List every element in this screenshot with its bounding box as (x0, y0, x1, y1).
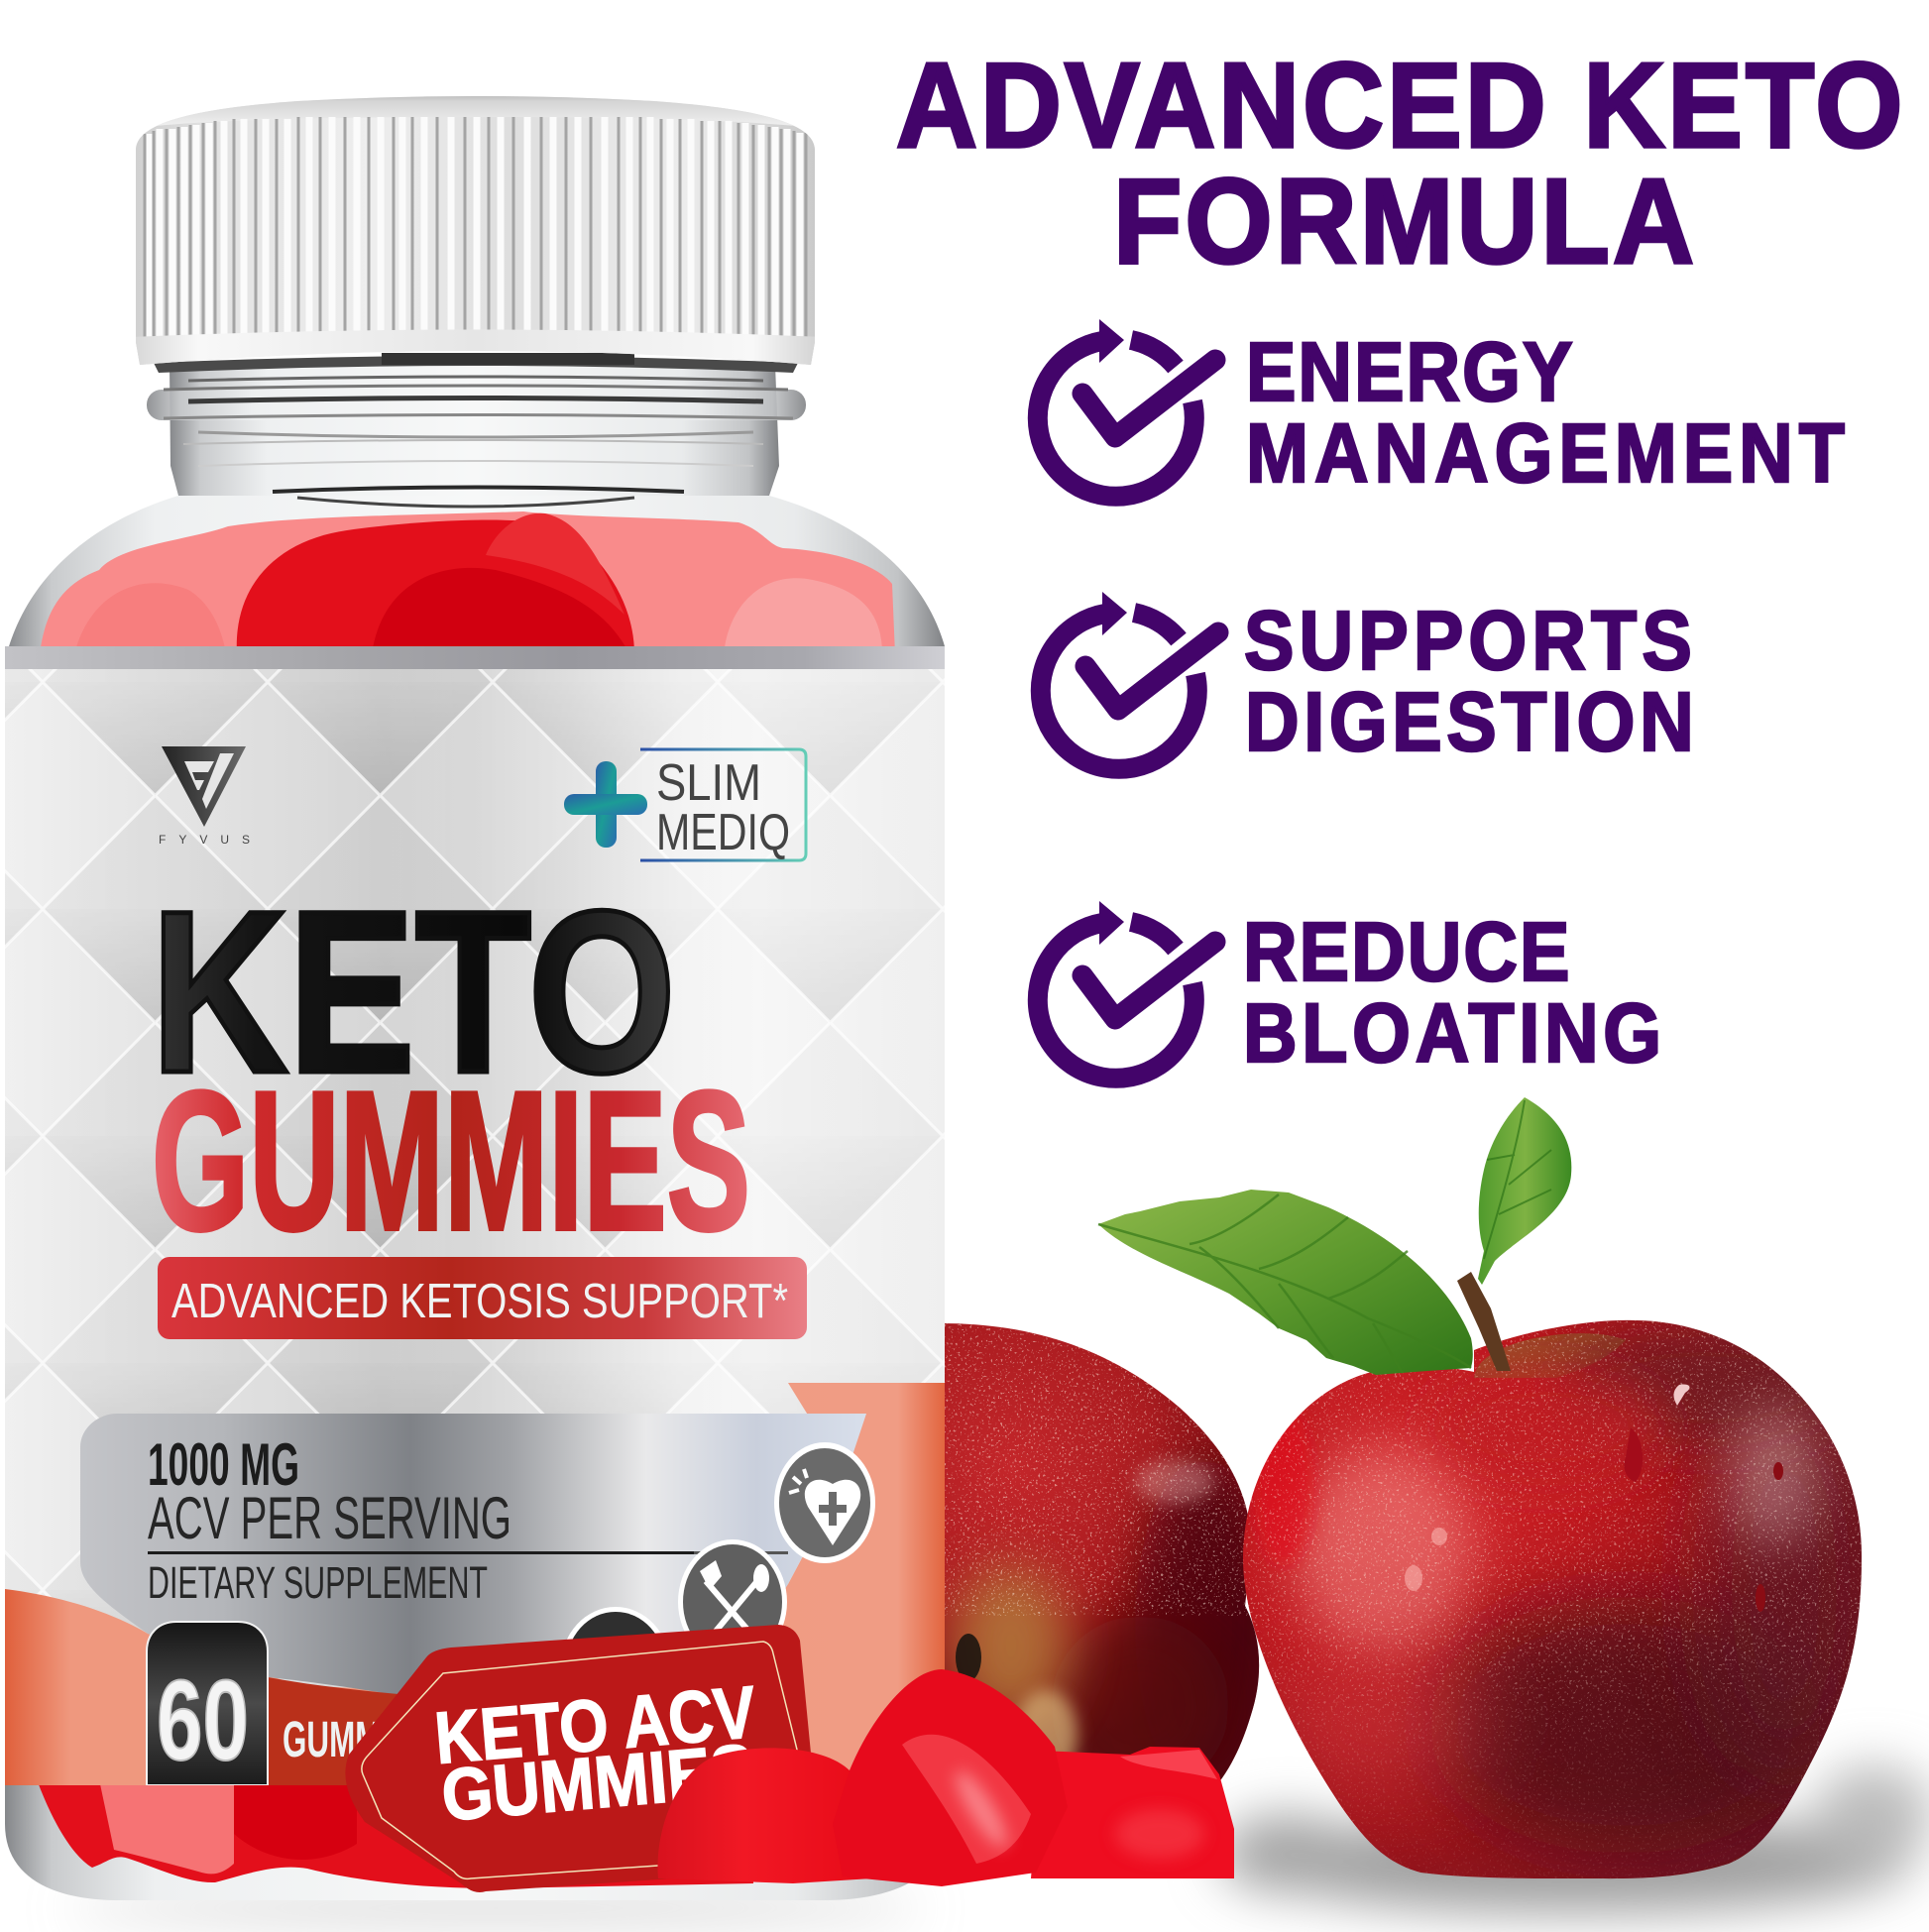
orange panel (5, 1383, 945, 1785)
leaf: large (1098, 1190, 1473, 1375)
gummy: right (1031, 1747, 1234, 1878)
text: gummies count: GUMMIES (283, 1711, 431, 1767)
price tag: keto acv gummies (345, 1625, 818, 1892)
label top band (5, 646, 945, 669)
product name: gummies: GUMMIES (152, 1051, 750, 1272)
bottle (5, 89, 945, 1900)
brand logo: fyvus: FYVUS (159, 833, 250, 847)
icon: energy check cycle (1038, 319, 1215, 497)
icon: bloating check cycle (1038, 901, 1215, 1079)
price tag: keto acv gummies: KETO ACV (432, 1670, 758, 1779)
apple: front (1239, 1316, 1866, 1883)
gummy: center (833, 1669, 1068, 1886)
count badge: 60 (147, 1622, 268, 1785)
apple shading (1239, 1316, 1866, 1883)
text: supports digestion: SUPPORTS (1244, 594, 1692, 687)
apple leaves and stem (1098, 1097, 1571, 1375)
gummies: bottom of jar (37, 1779, 753, 1888)
heading: advanced keto formula: ADVANCED KETO (896, 37, 1903, 172)
panel text: serving: ACV PER SERVING (148, 1485, 511, 1551)
bottle cap (129, 89, 823, 372)
text: reduce bloating: BLOATING (1243, 986, 1661, 1080)
gummies: top of jar (40, 511, 895, 654)
benefit: energy management (1038, 319, 1845, 500)
price tag: keto acv gummies: GUMMIES (438, 1728, 757, 1837)
text: energy management (1246, 325, 1845, 500)
benefit: reduce bloating (1038, 901, 1661, 1080)
red strip (268, 1677, 515, 1785)
silver panel (80, 1414, 866, 1705)
text: energy management: ENERGY (1246, 325, 1572, 418)
panel text: serving (148, 1431, 788, 1608)
count badge: 60: 60 (157, 1657, 249, 1784)
apple: back (945, 1323, 1259, 1780)
pill: advanced ketosis support: ADVANCED KETOSIS SUPPORT* (171, 1275, 788, 1328)
brand logo: slim mediq (564, 749, 806, 861)
text: reduce bloating: REDUCE (1243, 905, 1569, 998)
heading: advanced keto formula: FORMULA (1113, 153, 1694, 288)
product name: keto: KETO (151, 863, 676, 1121)
brand logo: slim mediq: MEDIQ (656, 804, 790, 861)
apple sheen and golden patch (942, 1318, 1274, 1794)
brand logo: fyvus (159, 746, 250, 847)
icon: third badge (561, 1607, 670, 1726)
icon: fork and spoon (678, 1539, 787, 1664)
text: supports digestion (1244, 594, 1694, 768)
stem (1457, 1272, 1511, 1371)
text: energy management: MANAGEMENT (1246, 406, 1845, 500)
benefit: supports digestion (1041, 592, 1694, 769)
bottle glass (5, 496, 945, 1900)
brand logo: slim mediq: SLIM (656, 754, 761, 812)
ground shadow (69, 1764, 1929, 1920)
bottle neck (147, 353, 806, 507)
panel text: serving: 1000 MG (148, 1431, 299, 1498)
icon: digestion check cycle (1041, 592, 1218, 769)
heading: advanced keto formula (896, 37, 1903, 288)
loose gummies (657, 1669, 1234, 1886)
leaf: small (1478, 1097, 1571, 1285)
apple cavity (1474, 1333, 1626, 1378)
icon: heart (774, 1442, 875, 1563)
panel text: serving: DIETARY SUPPLEMENT (148, 1557, 488, 1608)
text: supports digestion: DIGESTION (1245, 675, 1694, 768)
text: reduce bloating (1243, 905, 1661, 1080)
pill: advanced ketosis support (158, 1257, 807, 1339)
bottle label (5, 669, 945, 1785)
gummy: left (657, 1748, 872, 1883)
